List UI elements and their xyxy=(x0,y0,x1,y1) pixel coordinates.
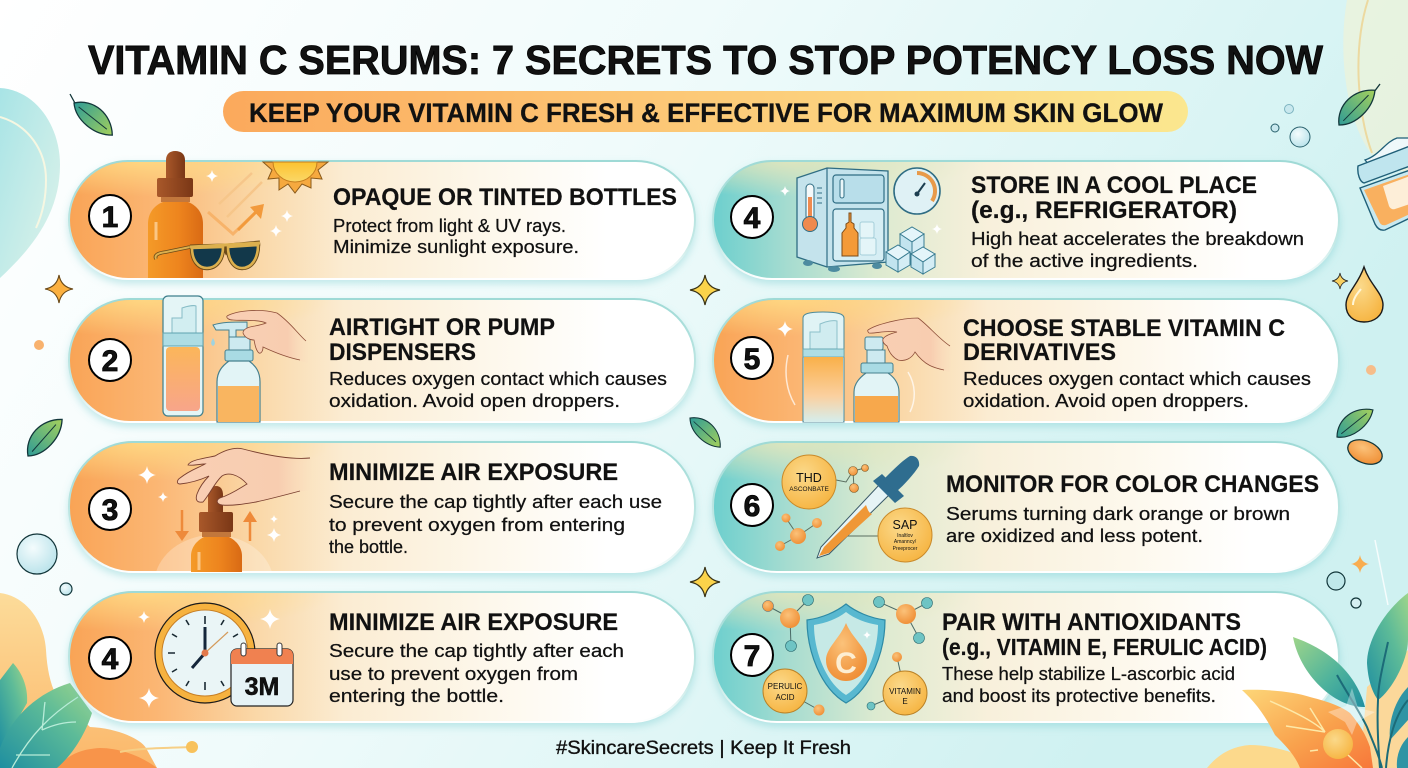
icon: amber bottle, sun and sunglasses xyxy=(148,151,328,278)
body text: the bottle. xyxy=(329,536,408,557)
background decoration: bottom-right plants xyxy=(1207,540,1408,768)
heading xyxy=(942,609,1267,660)
icon: leaf left xyxy=(19,411,69,462)
icon: leaf top right xyxy=(1331,82,1381,131)
body text: These help stabilize L-ascorbic acid xyxy=(942,663,1235,684)
body text xyxy=(329,640,624,706)
number badge 6 xyxy=(731,484,773,526)
icon: hand tightening dropper cap xyxy=(138,448,312,572)
body text: use to prevent oxygen from xyxy=(329,663,578,684)
number badge 7 xyxy=(731,634,773,676)
icon: leaf top left xyxy=(68,94,120,142)
body text: Reduces oxygen contact which causes xyxy=(963,368,1311,389)
body text: High heat accelerates the breakdown xyxy=(971,228,1304,249)
heading xyxy=(963,315,1285,366)
icon: dropper and molecules: SAP xyxy=(892,518,918,532)
body text xyxy=(333,215,579,257)
number badge 4: 4 xyxy=(744,202,761,235)
body text: to prevent oxygen from entering xyxy=(329,514,625,535)
panel: tip 2 pump dispensers xyxy=(69,296,695,422)
panel: tip 3 minimize air exposure xyxy=(69,442,695,572)
body text: Serums turning dark orange or brown xyxy=(946,503,1290,524)
icon: dropper and molecules: ASCONBATE xyxy=(789,486,829,493)
heading: MINIMIZE AIR EXPOSURE xyxy=(329,609,618,636)
subtitle banner: KEEP YOUR VITAMIN C FRESH & EFFECTIVE FOR MAXIMUM SKIN GLOW xyxy=(249,98,1163,128)
icon: leaf centre xyxy=(685,411,727,453)
body text: Minimize sunlight exposure. xyxy=(333,236,579,257)
number badge 3 xyxy=(89,488,131,530)
icon: shield, drop and molecules: C xyxy=(835,647,857,680)
panel: tip 5 stable derivatives xyxy=(713,299,1339,422)
body text: and boost its protective benefits. xyxy=(942,685,1216,706)
number badge 5: 5 xyxy=(744,343,760,376)
icon: leaf and seed right xyxy=(1331,401,1386,469)
number badge 3: 3 xyxy=(102,494,118,527)
body text: are oxidized and less potent. xyxy=(946,525,1203,546)
icon: shield, drop and molecules: ACID xyxy=(775,693,795,702)
number badge 2: 2 xyxy=(102,345,118,378)
heading: STORE IN A COOL PLACE xyxy=(971,172,1257,199)
panel: tip 7 antioxidants xyxy=(713,592,1339,722)
heading: CHOOSE STABLE VITAMIN C xyxy=(963,315,1285,342)
icon: clock with 3M calendar xyxy=(138,603,293,708)
body text xyxy=(942,663,1235,706)
background decoration: bottom-left blob and leaves xyxy=(0,593,198,768)
number badge 2 xyxy=(89,339,131,381)
panel: tip 1 opaque bottles xyxy=(69,151,695,279)
icon: cream jar xyxy=(1358,138,1408,230)
footer hashtag: #SkincareSecrets | Keep It Fresh xyxy=(556,738,851,759)
heading xyxy=(329,314,555,366)
number badge 4 xyxy=(89,637,131,679)
heading xyxy=(971,172,1257,224)
title: VITAMIN C SERUMS: 7 SECRETS TO STOP POTENCY LOSS NOW xyxy=(88,37,1323,83)
panel: tip 4 store cool xyxy=(713,161,1339,279)
heading: AIRTIGHT OR PUMP xyxy=(329,314,555,341)
icon: airless tube and pump bottle with hand xyxy=(163,296,308,422)
icon: dropper and molecules: THD xyxy=(796,471,822,485)
icon: shield, drop and molecules: E xyxy=(902,697,908,706)
number badge 4 xyxy=(731,196,773,238)
heading: DERIVATIVES xyxy=(963,339,1116,366)
icon: dropper and molecules xyxy=(775,455,932,562)
icon: shield, drop and molecules: VITAMIN xyxy=(889,687,921,696)
number badge 1 xyxy=(89,195,131,237)
body text: Secure the cap tightly after each use xyxy=(329,491,662,512)
background decoration: top-left blob xyxy=(0,88,60,278)
number badge 7: 7 xyxy=(744,640,760,673)
icon: bubbles and dots xyxy=(17,104,1376,608)
body text: of the active ingredients. xyxy=(971,250,1198,271)
heading: (e.g., REFRIGERATOR) xyxy=(971,197,1237,224)
body text xyxy=(963,368,1311,411)
body text: entering the bottle. xyxy=(329,685,504,706)
panel: tip 4 clock and calendar xyxy=(69,592,695,722)
number badge 5 xyxy=(731,337,773,379)
number badge 4: 4 xyxy=(102,643,119,676)
body text xyxy=(946,503,1290,546)
body text xyxy=(329,491,662,557)
body text: Secure the cap tightly after each xyxy=(329,640,624,661)
icon: shield, drop and molecules: PERULIC xyxy=(768,682,803,691)
number badge 6: 6 xyxy=(744,490,760,523)
heading: DISPENSERS xyxy=(329,339,476,366)
background decoration: top-right glass circle xyxy=(1343,0,1408,172)
body text xyxy=(329,368,667,411)
heading: OPAQUE OR TINTED BOTTLES xyxy=(333,184,677,211)
icon: shield, drop and molecules xyxy=(762,594,932,716)
body text xyxy=(971,228,1304,271)
body text: oxidation. Avoid open droppers. xyxy=(963,390,1249,411)
icon: mini fridge, gauge and ice cubes xyxy=(780,168,942,274)
body text: Protect from light & UV rays. xyxy=(333,215,566,236)
body text: Reduces oxygen contact which causes xyxy=(329,368,667,389)
number badge 1: 1 xyxy=(102,201,118,234)
heading: (e.g., VITAMIN E, FERULIC ACID) xyxy=(942,634,1267,660)
icon: airless tube and pump bottle with hand xyxy=(777,312,952,422)
heading: MINIMIZE AIR EXPOSURE xyxy=(329,459,618,486)
icon: dropper and molecules: Amanncy/ xyxy=(894,539,917,545)
body text: oxidation. Avoid open droppers. xyxy=(329,390,620,411)
icon: dropper and molecules: Inaltlov xyxy=(897,533,913,539)
icon: serum drop xyxy=(1346,267,1383,322)
panel: tip 6 monitor colour xyxy=(713,442,1339,572)
icon: clock with 3M calendar: 3M xyxy=(245,673,279,701)
icon: dropper and molecules: Preeprocer xyxy=(893,546,918,552)
heading: MONITOR FOR COLOR CHANGES xyxy=(946,471,1319,498)
icon: sparkles xyxy=(45,273,1369,597)
heading: PAIR WITH ANTIOXIDANTS xyxy=(942,609,1241,636)
